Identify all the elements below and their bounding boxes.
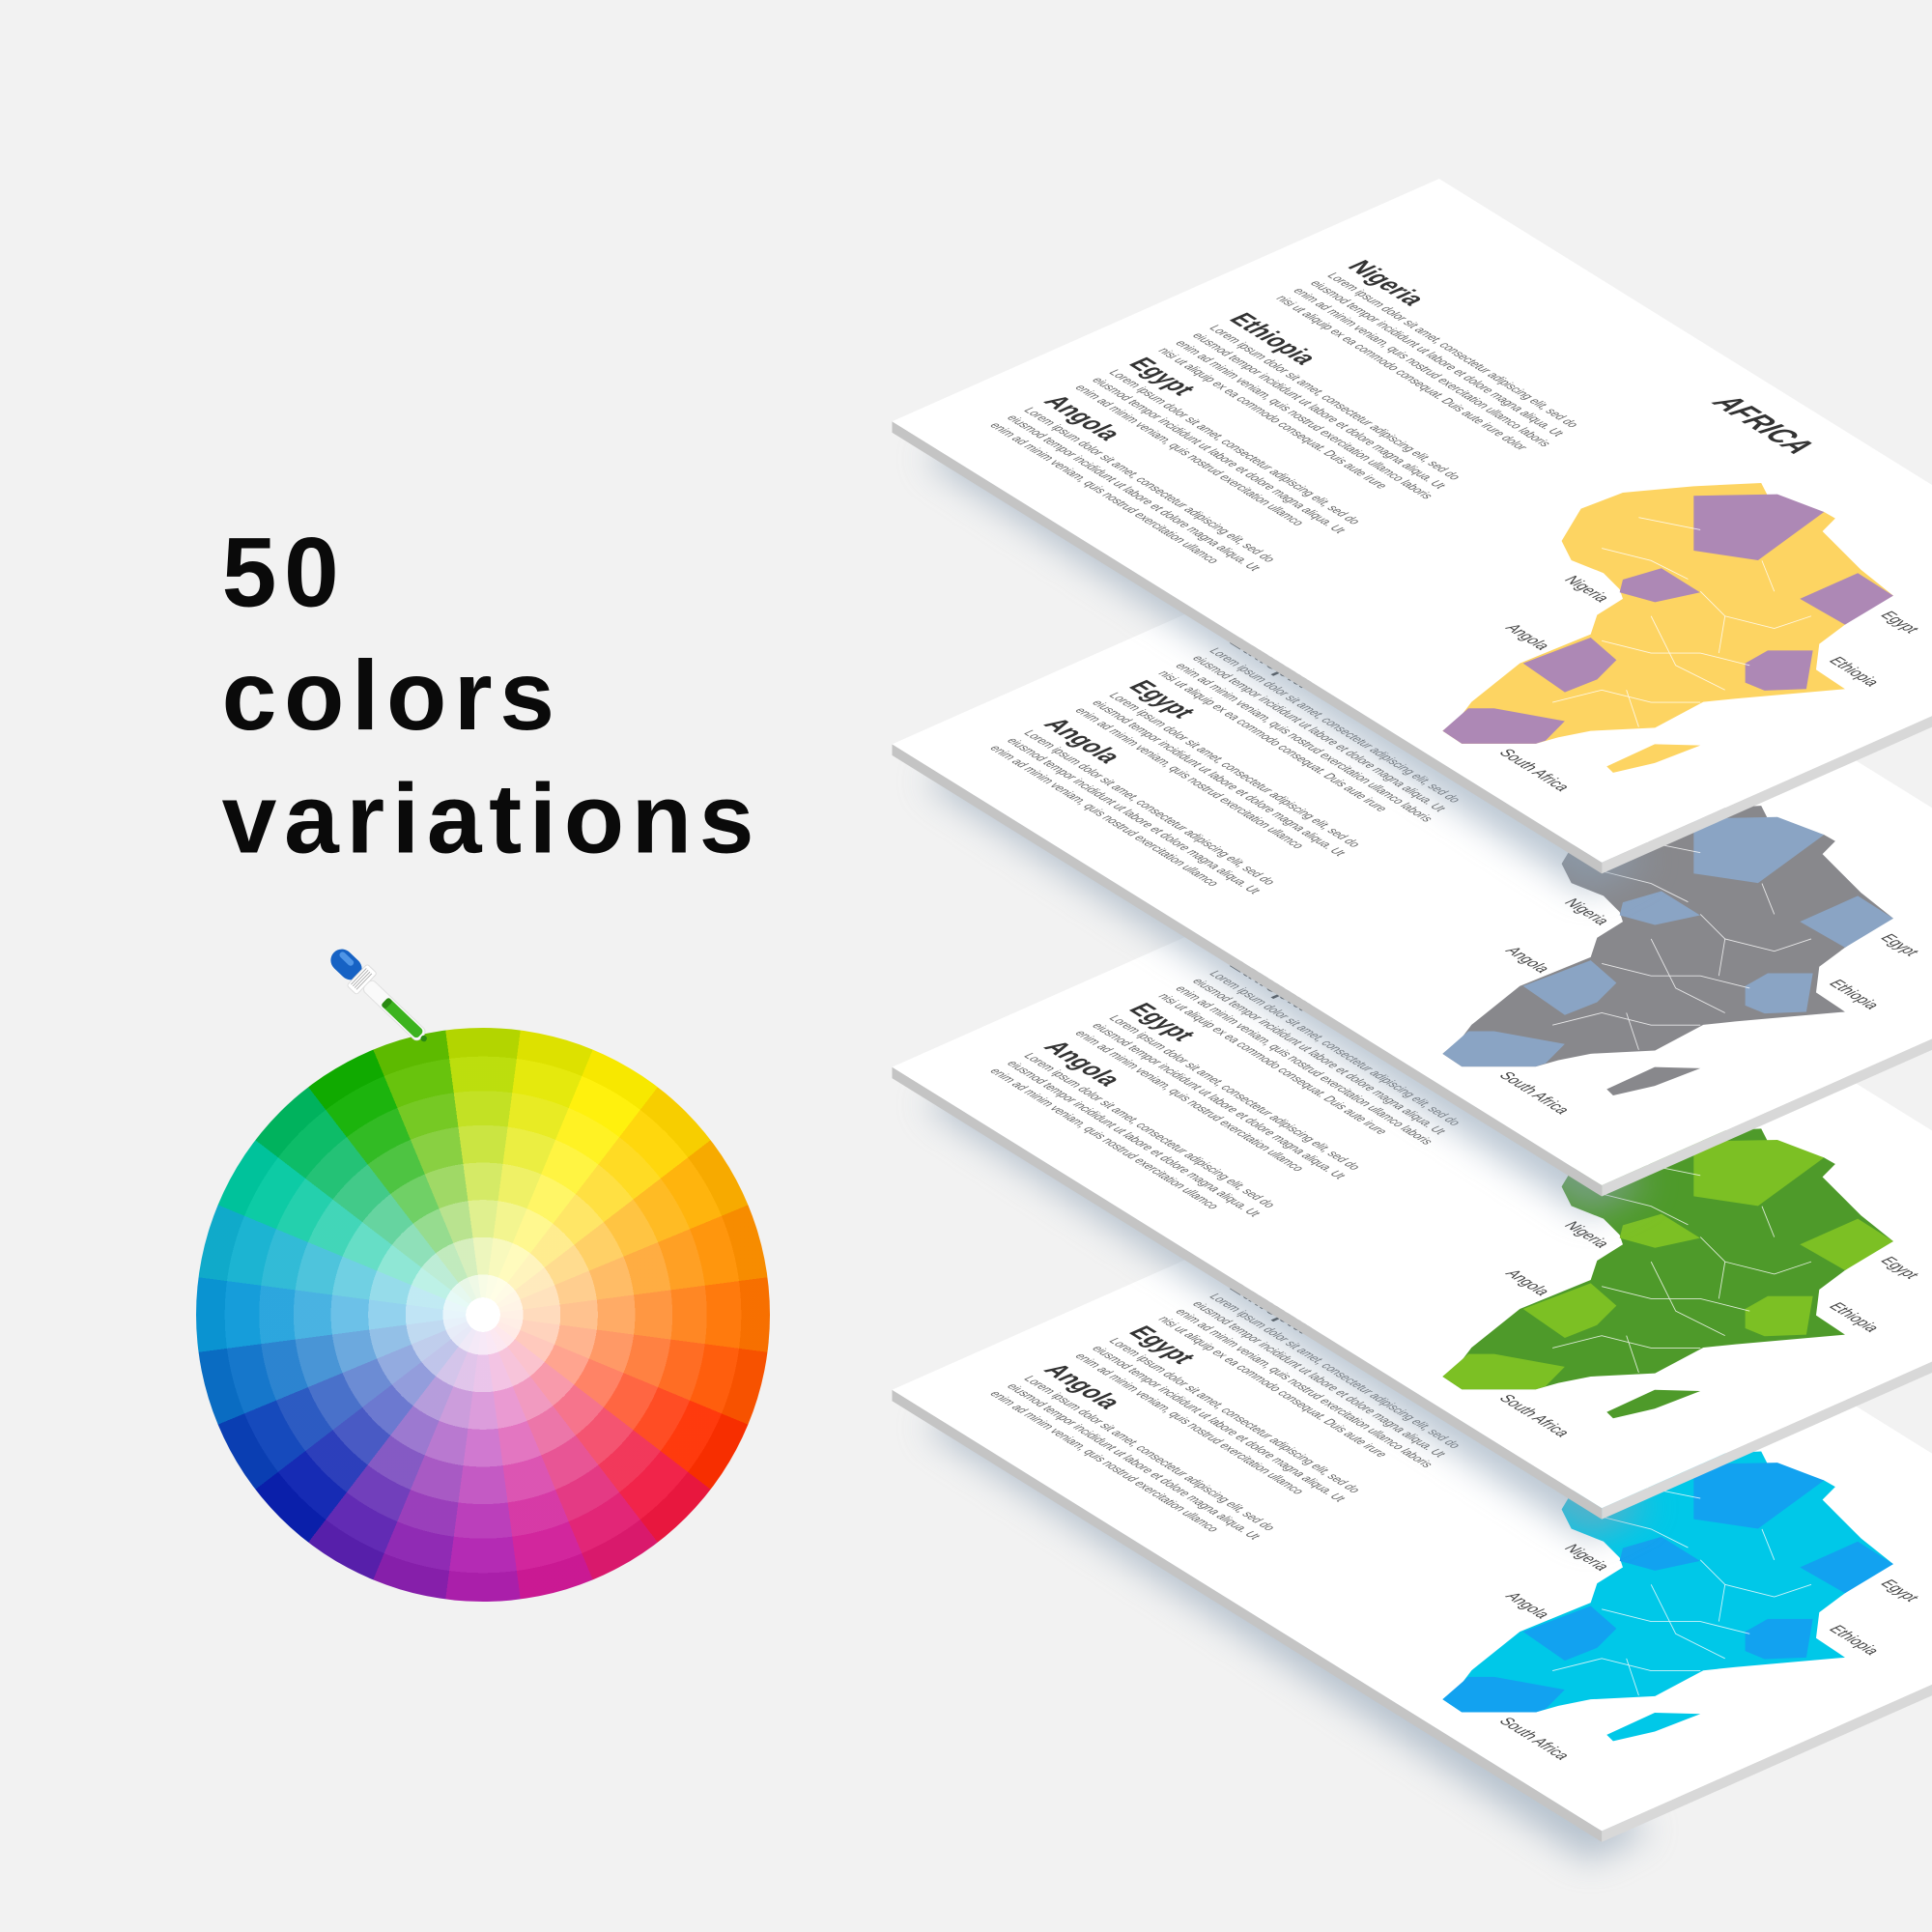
panel: sheet 4 (cyan): [892, 1148, 1932, 1861]
panel: sheet 2 (gray): [892, 501, 1932, 1216]
panel: sheet 3 (green): [892, 824, 1932, 1539]
panel: sheet 1 (yellow): [892, 179, 1932, 894]
title: 50: [222, 518, 346, 628]
map: yellow Africa: [1442, 483, 1893, 773]
title: [222, 518, 761, 874]
color wheel: [196, 1028, 770, 1602]
title: colors: [222, 640, 562, 751]
map: cyan Africa: [1442, 1452, 1893, 1741]
title: variations: [222, 764, 761, 874]
map: green Africa: [1442, 1128, 1893, 1418]
icon: eyedropper: [324, 942, 437, 1051]
map: gray Africa: [1442, 806, 1893, 1095]
